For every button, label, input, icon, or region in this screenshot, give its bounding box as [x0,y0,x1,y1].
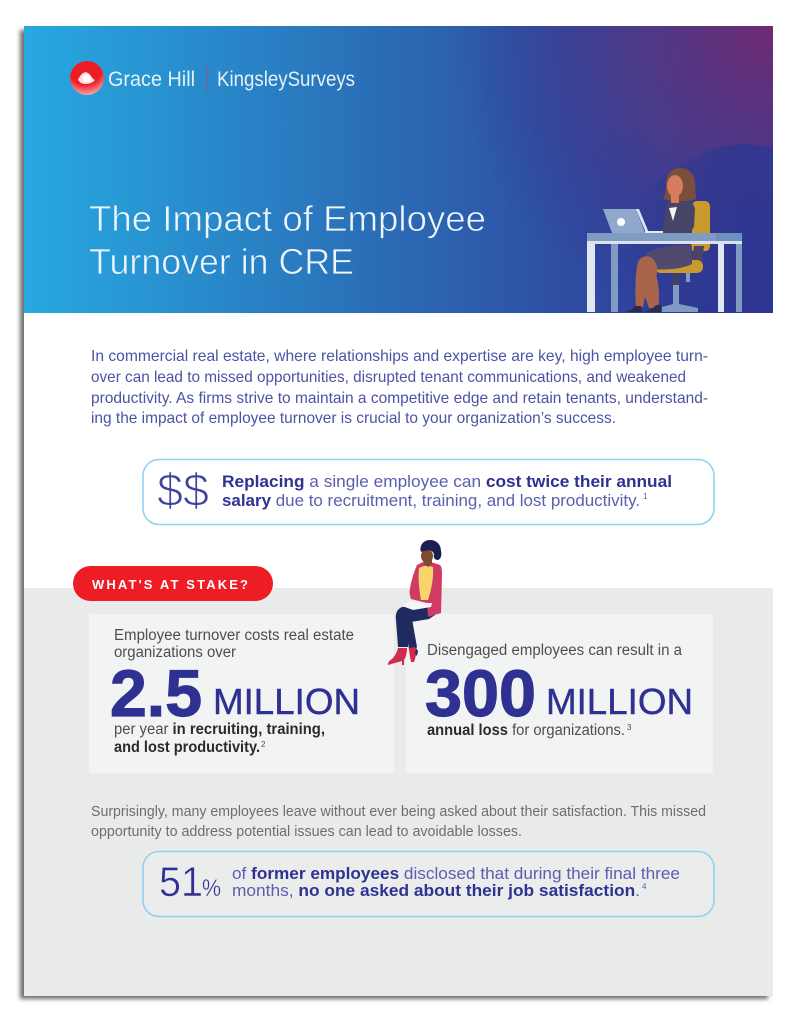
stat description: and lost productivity. [114,739,260,756]
callout: job satisfaction [143,852,714,916]
panel: header banner [24,26,773,313]
callout text: Replacing a single employee can cost twice their annual [222,472,672,491]
stat: 51 percent: 51 [159,858,203,905]
stat lead-in: organizations over [114,644,236,661]
stat description [114,721,325,756]
stat lead-in: Disengaged employees can result in a [427,642,682,659]
callout text: 1 [643,492,648,501]
panel: 2.5 million stat [89,614,394,773]
stat: 51 percent: % [202,875,221,902]
callout text [232,864,680,900]
stat description: 2 [261,740,266,749]
stat: 300 million: MILLION [546,681,693,722]
paragraph: missed opportunity [91,804,706,840]
logo divider [207,66,208,91]
stat: 2.5 million: 2.5 [110,656,202,730]
intro paragraph: In commercial real estate, where relationships and expertise are key, high employee turn- [91,348,708,365]
logo [70,61,355,95]
label: what's at stake [73,566,273,601]
logo wordmark: Grace Hill [108,68,195,91]
title [89,198,486,282]
decorative hump [590,144,773,313]
stat lead-in: Employee turnover costs real estate [114,627,354,644]
intro paragraph: ing the impact of employee turnover is crucial to your organization’s success. [91,410,616,427]
intro paragraph: productivity. As firms strive to maintain a competitive edge and retain tenants, understand- [91,390,708,407]
title: Turnover in CRE [89,241,354,282]
label: what's at stake: WHAT'S AT STAKE? [92,577,248,592]
callout text: of former employees disclosed that during their final three [232,864,680,883]
intro paragraph: over can lead to missed opportunities, disrupted tenant communications, and weakened [91,369,686,386]
icon: dollar signs: $$ [157,464,209,516]
callout text: 4 [642,882,647,891]
stat lead-in [114,627,354,661]
stat: 2.5 million [110,656,360,730]
panel: 300 million stat [406,614,713,773]
icon: Grace Hill mark [70,61,104,95]
stat: 300 million [425,656,693,730]
callout: replacement cost [143,460,714,524]
callout text [222,472,672,510]
illustration: seated woman [388,540,442,665]
partner wordmark: KingsleySurveys [217,68,355,91]
callout text: months, no one asked about their job satisfaction . [232,881,640,900]
stat description: per year in recruiting, training, [114,721,325,738]
paragraph: missed opportunity: opportunity to address potential issues can lead to avoidable losses. [91,824,522,840]
intro paragraph [91,348,708,427]
paragraph: missed opportunity: Surprisingly, many employees leave without ever being asked about their satisfaction. This missed [91,804,706,820]
title: The Impact of Employee [89,198,486,239]
stat: 300 million: 300 [425,656,536,730]
stat: 2.5 million: MILLION [213,681,360,722]
illustration: woman at desk [587,168,742,312]
stat description: annual loss for organizations. [427,722,625,739]
stat description: 3 [627,723,632,732]
callout text: salary due to recruitment, training, and lost productivity. [222,491,640,510]
